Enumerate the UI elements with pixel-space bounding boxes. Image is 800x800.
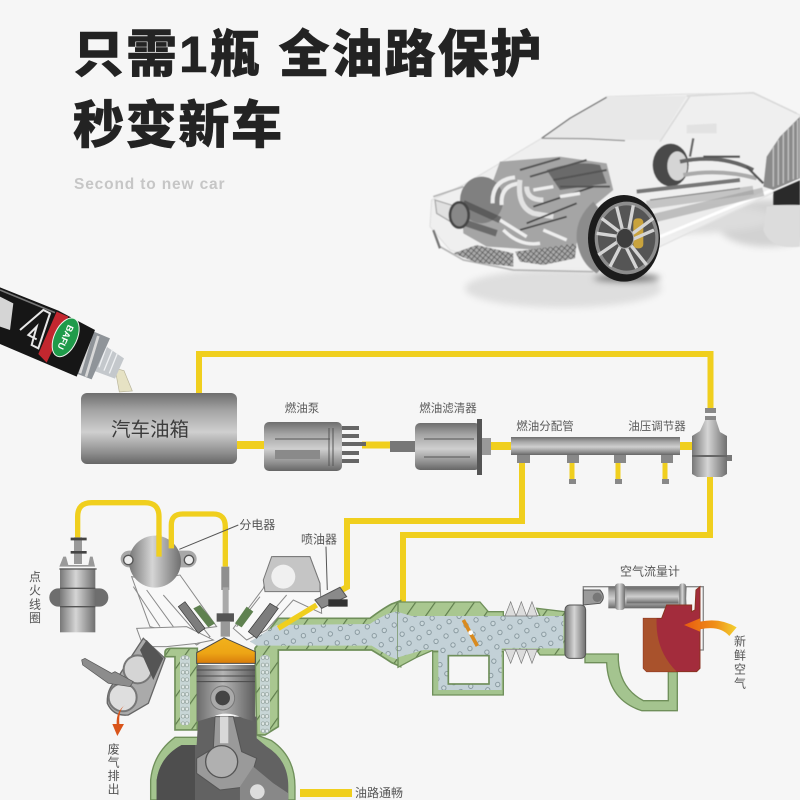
- air meter pivot: [583, 590, 603, 605]
- cylinder head outlines: [132, 557, 322, 647]
- ignition coil: [49, 537, 108, 632]
- piston: [197, 665, 255, 722]
- distributor label: 分电器: [239, 518, 275, 532]
- intake lower loop: [433, 652, 503, 695]
- fresh air label: 空: [734, 662, 746, 676]
- manifold air channel: [250, 611, 401, 661]
- right cooling channel: [260, 655, 270, 733]
- intake air channel: [398, 612, 563, 690]
- crankcase dark left: [157, 745, 195, 800]
- distributor yellow wire: [171, 514, 225, 567]
- pipe: rail to injector: [338, 460, 522, 592]
- fresh air label: 鲜: [734, 648, 746, 662]
- bottle collar: [76, 330, 110, 379]
- fresh air label: 气: [734, 675, 746, 690]
- intake loop opening: [448, 656, 489, 684]
- legend: oil path clear: [300, 785, 403, 800]
- coil label: 火: [29, 584, 41, 598]
- pipe: rail to regulator: [680, 442, 693, 450]
- drive shaft: [637, 180, 740, 192]
- subtitle: Second to new car: [74, 176, 225, 193]
- engine: [462, 157, 613, 250]
- coil label: 点: [29, 570, 41, 584]
- pipe: tank to pump: [237, 441, 265, 449]
- air hose elbow: [585, 654, 677, 711]
- title line 1: 只需1瓶 全油路保护: [73, 26, 544, 83]
- bottle body: [0, 287, 95, 377]
- bellows teeth: [505, 602, 537, 663]
- legend label: 油路通畅: [355, 785, 403, 800]
- coil label: 线: [29, 597, 41, 611]
- exhaust port: [82, 638, 165, 715]
- rear exhaust block: [763, 117, 800, 190]
- exhaust label: 出: [108, 782, 120, 796]
- injector label: 喷油器: [301, 532, 337, 546]
- fuel tank: [81, 393, 237, 464]
- connecting rod: [197, 717, 257, 790]
- pipe: pump to filter: [362, 442, 392, 448]
- air flow meter tube: [608, 583, 687, 610]
- combustion flame: [197, 638, 255, 663]
- injector leader line: [326, 547, 327, 590]
- fuel injector: [315, 587, 348, 608]
- fuel additive bottle: [0, 287, 132, 392]
- air meter label: 空气流量计: [620, 563, 680, 578]
- injector stubs: [572, 462, 665, 480]
- spark plug: [217, 567, 234, 637]
- crank gear: [240, 767, 288, 800]
- pressure regulator: [692, 408, 732, 477]
- front wheel sidewall: [577, 202, 627, 273]
- crankcase interior: [157, 717, 288, 800]
- car floor shadows: [465, 200, 800, 308]
- fresh air label: [734, 633, 746, 690]
- car illustration: [430, 93, 800, 308]
- fuel injector pipe: [278, 605, 317, 628]
- head casting: [263, 557, 320, 592]
- exhaust arrow: [112, 705, 125, 736]
- intake outer wall: [398, 602, 565, 667]
- bottle white artwork: [0, 297, 13, 330]
- crankcase outer wall: [151, 735, 295, 800]
- regulator label: 油压调节器: [628, 419, 686, 433]
- title: [73, 26, 544, 154]
- tank label: 汽车油箱: [111, 419, 189, 441]
- fuel rail: [511, 419, 686, 484]
- valve stems: [178, 602, 278, 638]
- air outline: [583, 587, 703, 650]
- fuel filter: [390, 401, 491, 475]
- coil label: [29, 570, 41, 625]
- fresh air arrow: [684, 618, 737, 636]
- bottle stripes: [0, 290, 55, 313]
- head port: [271, 565, 295, 589]
- exhaust label: 废: [108, 741, 120, 756]
- air filter shade: [643, 618, 677, 672]
- pipe: regulator to manifold: [403, 476, 710, 612]
- left cooling channel: [180, 655, 190, 725]
- rail label: 燃油分配管: [516, 419, 574, 433]
- bottle green label: BAFU: [55, 323, 75, 351]
- ignition yellow wires: [78, 503, 159, 557]
- coil label: 圈: [29, 611, 41, 625]
- front wheel tyre and rim: [588, 195, 660, 282]
- rear suspension: [680, 159, 753, 170]
- title line 2: 秒变新车: [73, 97, 284, 154]
- fuel pump: [264, 401, 366, 471]
- badge ring: [450, 202, 469, 228]
- engine diagram: [29, 503, 401, 800]
- pipe: tank return to regulator: [199, 354, 710, 410]
- front grilles: [453, 245, 513, 267]
- car body shell: [430, 93, 800, 273]
- exhaust label: [108, 741, 120, 796]
- throttle plate: [463, 620, 477, 646]
- rear wheel: [653, 144, 689, 186]
- distributor: [121, 535, 197, 588]
- intake assembly: [398, 563, 746, 711]
- pipe: filter to rail: [488, 442, 512, 450]
- exhaust label: 气: [108, 755, 120, 770]
- pump label: 燃油泵: [285, 401, 320, 415]
- air meter elbow: [565, 605, 586, 658]
- distributor leader line: [179, 525, 238, 549]
- bottle red band: [38, 312, 68, 363]
- filter label: 燃油滤清器: [419, 401, 477, 415]
- fuel pipes: [199, 354, 710, 612]
- air filter box: [643, 587, 700, 672]
- exhaust label: 排: [108, 769, 120, 783]
- right cylinder wall and manifold wall: [255, 601, 401, 735]
- fresh air label: 新: [734, 633, 746, 648]
- bottle liquid pour: [115, 368, 132, 392]
- rim spokes: [597, 205, 654, 268]
- bottle neck thread: [92, 343, 124, 379]
- left cylinder wall: [165, 648, 197, 730]
